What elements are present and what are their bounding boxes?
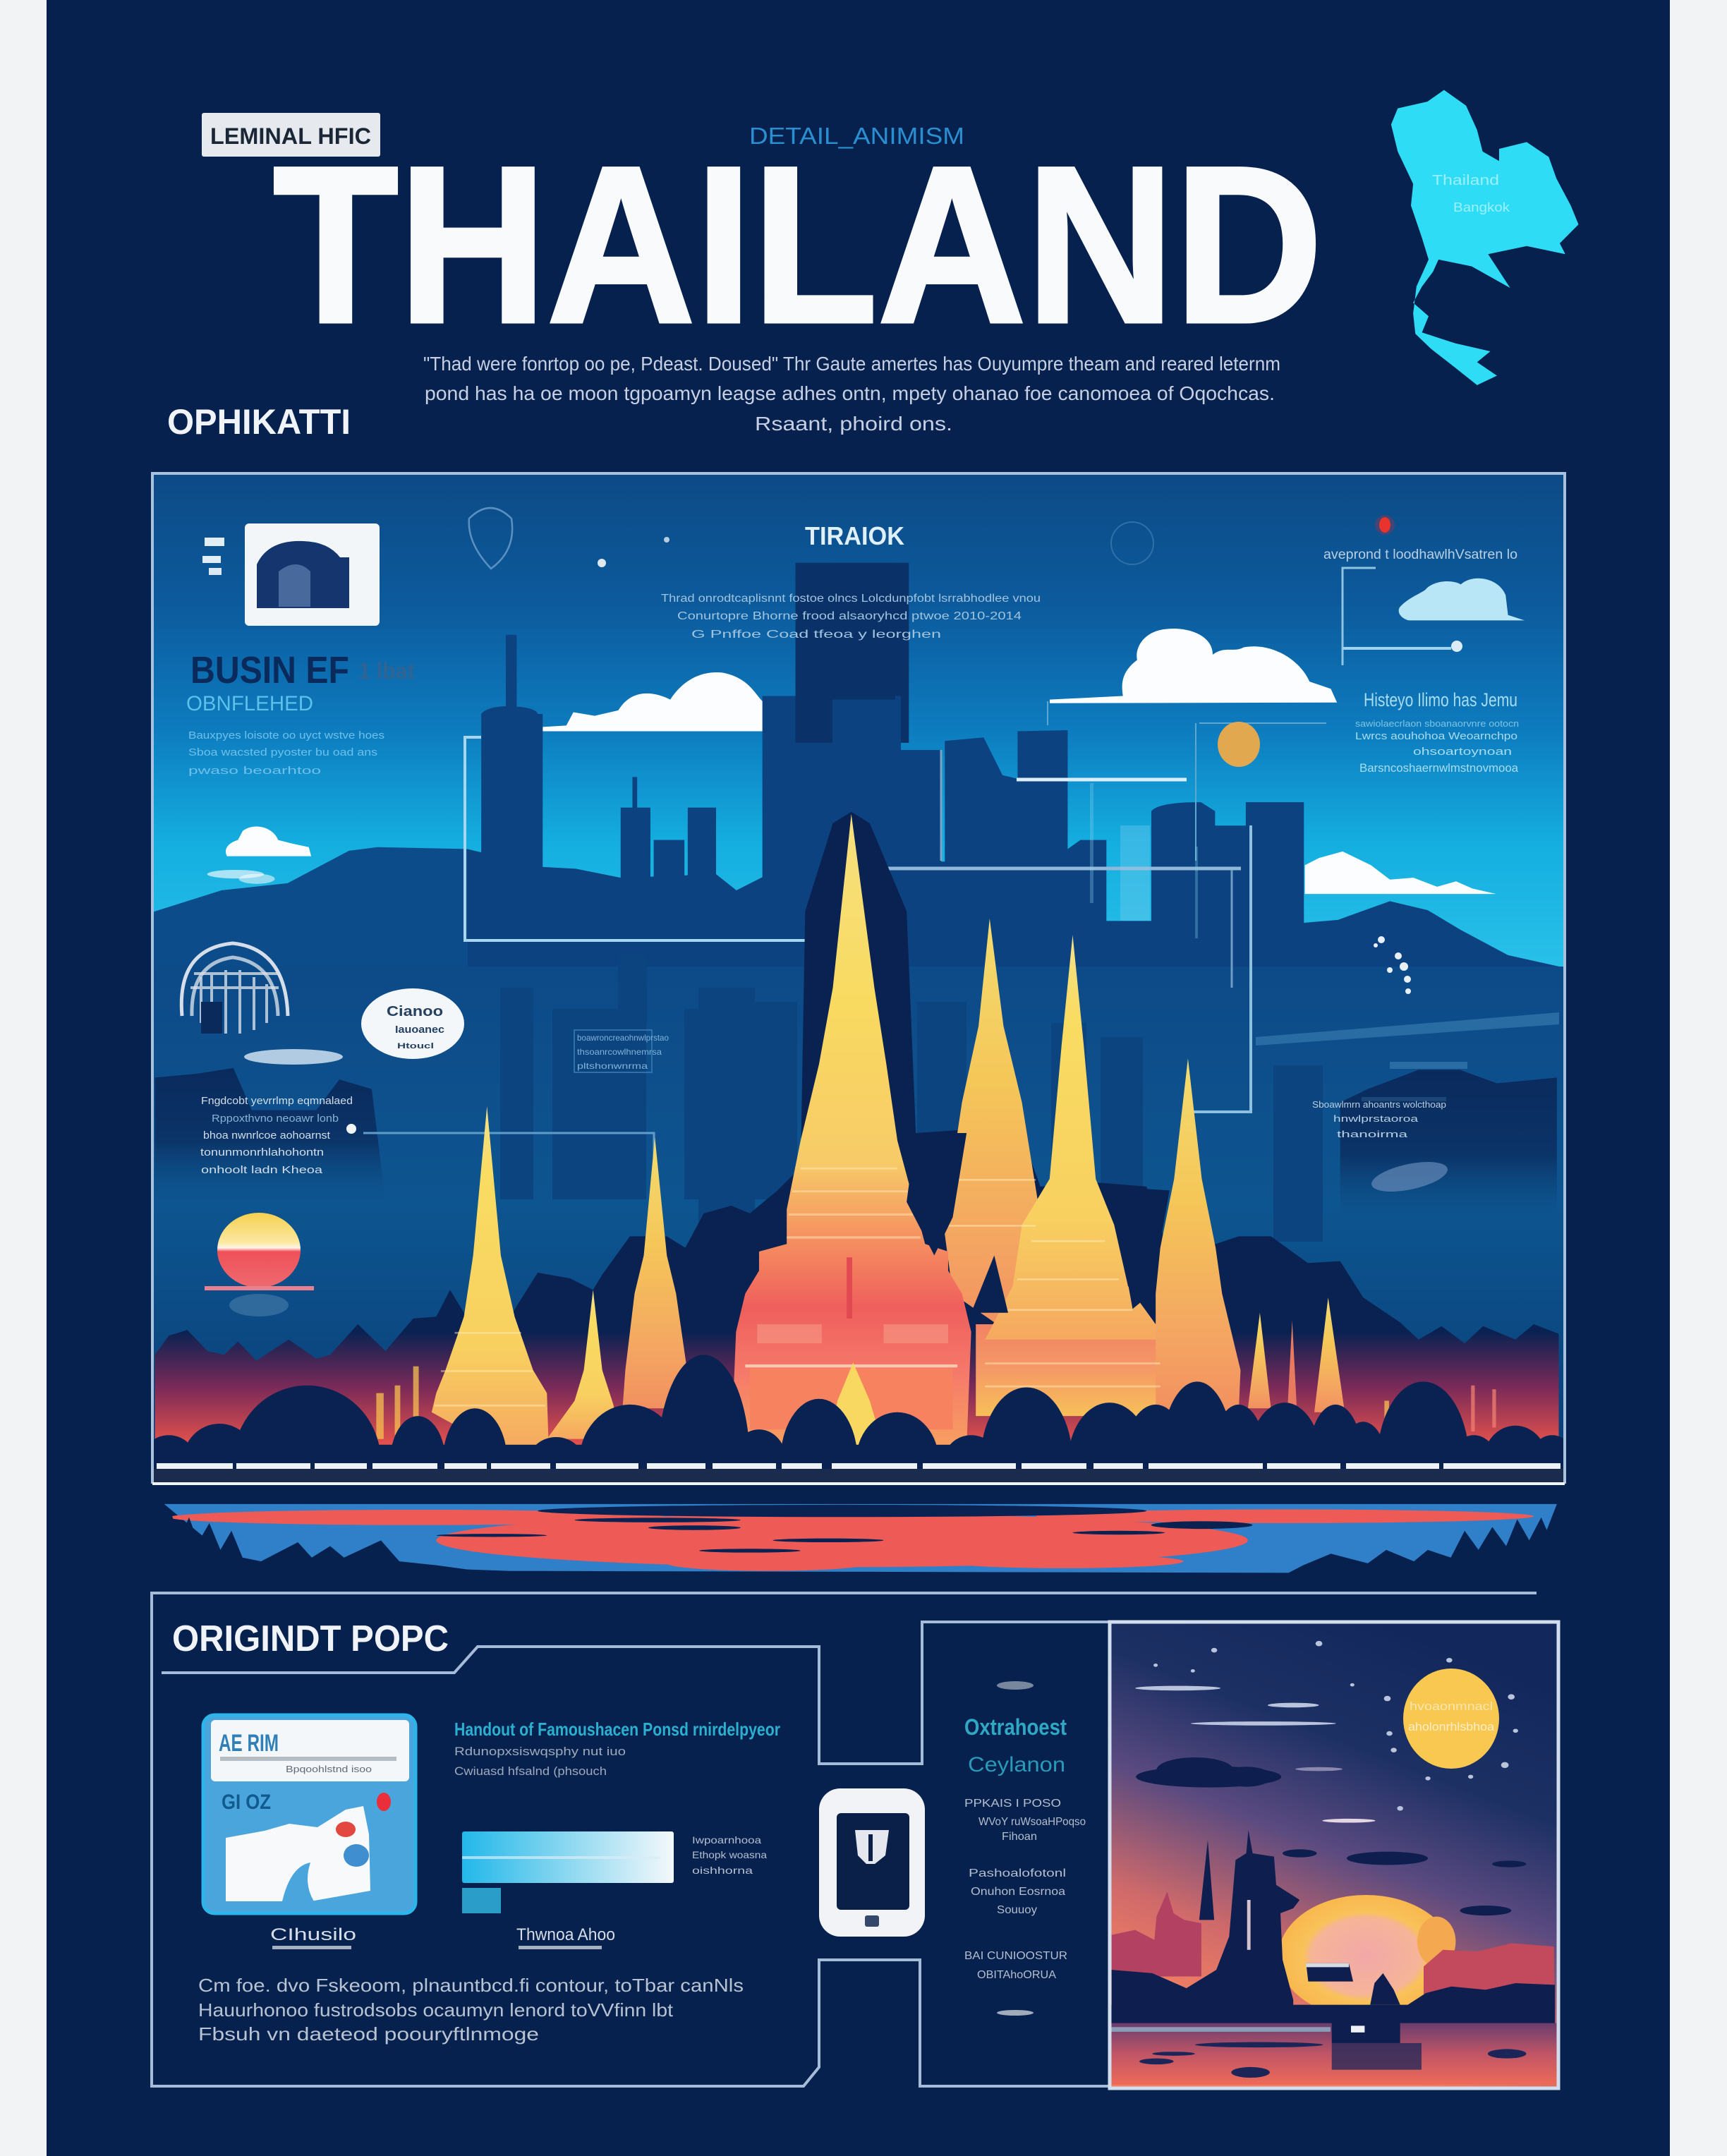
right text block: Histeyo Ilimo has Jemu [1364,689,1517,710]
section label: OPHIKATTI [167,402,351,442]
badge oval [361,988,464,1059]
right lower text block: Sboawlmrn ahoantrs wolcthoap [1312,1099,1446,1110]
right text block: sawiolaecrlaon sboanaorvnre ootocn [1355,718,1519,729]
left heading text block: OBNFLEHED [186,692,313,715]
temple [376,814,1496,1451]
bar chart: Iwpoarnhooa [692,1834,761,1846]
connector lines [363,568,1451,1171]
badge oval: Htoucl [397,1042,434,1050]
central mini text block: boawroncreaohnwlprstao [577,1033,669,1043]
map of Thailand [1391,90,1579,385]
spire: right gold [985,935,1174,1340]
bar caption: Thwnoa Ahoo [516,1925,615,1944]
subtitle: DETAIL_ANIMISM [749,123,964,149]
right brush marks [1256,1012,1559,1101]
intro text: Rsaant, phoird ons. [755,413,952,435]
bar chart [462,1831,767,1913]
icon: white flowers [1374,936,1411,994]
sunset panel frame [1110,1622,1558,2088]
icon: phone [819,1788,925,1937]
center heading text block [661,521,1041,641]
river reflection [155,1502,1558,1585]
setting sun [205,1213,314,1316]
translucent light beams [1090,783,1198,938]
left lower text block: bhoa nwnrlcoe aohoarnst [203,1130,331,1141]
right text block: Lwrcs aouhohoa Weoarnchpo [1355,730,1517,742]
left mountain [153,847,467,969]
wing: right hall [976,1324,1179,1416]
badge oval: Cianoo [387,1004,443,1019]
lower panel background [152,967,1565,1484]
spire: slim right [1156,1058,1240,1412]
left lower text block: Fngdcobt yevrrlmp eqmnalaed [201,1095,353,1107]
central hall detail [745,1257,957,1451]
bottom paragraph [198,1975,744,2045]
card caption: CIhusilo [270,1925,356,1944]
side column text: Souuoy [997,1904,1037,1916]
sunset illustration panel [1110,1622,1558,2088]
central mini text block: pltshonwnrma [577,1061,648,1071]
main panel frame [152,473,1565,1484]
left heading text block: BUSIN EF [190,649,349,691]
skyline [467,563,1559,967]
left heading text block [186,649,415,777]
card: map [203,1715,416,1913]
center heading text block: Thrad onrodtcaplisnnt fostoe olncs Lolcdunpfobt lsrrabhodlee vnou [661,593,1041,605]
icon: red marker with caption [1323,515,1517,562]
spire: central main [732,814,971,1447]
feature heading text: Cwiuasd hfsalnd (phsouch [454,1764,607,1778]
left heading text block: Sboa wacsted pyoster bu oad ans [188,746,377,758]
right text block: ohsoartoynoan [1413,746,1512,758]
spire: far right [943,919,1041,1332]
map of Thailand: Bangkok [1453,200,1510,214]
streak clouds and stars [1135,1641,1518,1823]
feature heading text [454,1719,780,1778]
main illustration panel [141,473,1575,1569]
clouds [207,579,1525,894]
left lower text block [200,1095,353,1176]
feature heading text: Handout of Famoushacen Ponsd rnirdelpyeor [454,1719,780,1740]
left lower text block: Rppoxthvno neoawr lonb [212,1113,339,1125]
side column text: PPKAIS I POSO [964,1798,1061,1810]
callout dot [346,1124,356,1134]
center heading text block: Conurtopre Bhorne frood alsaoryhcd ptwoe 2010-2014 [677,610,1022,622]
right lower text block [1312,1099,1446,1139]
left heading text block: 1 lbat [358,658,415,684]
spire: small right pair [1248,1297,1345,1412]
side column text: OBITAhoORUA [977,1969,1056,1981]
spire: left inner [622,1137,687,1408]
water [1110,2016,1557,2085]
card: map: AE RIM [219,1730,279,1757]
right text block: Barsncoshaernwlmstnovmooa [1359,761,1519,775]
feature heading text: Rdunopxsiswqsphy nut iuo [454,1745,626,1758]
bar chart: oishhorna [692,1865,753,1876]
tag label [202,113,380,157]
moon badge: hvoaonmnacl [1410,1700,1493,1713]
spire: left gold [432,1106,549,1451]
center heading text block: TIRAIOK [805,521,904,550]
card: map: Bpqoohlstnd isoo [286,1764,372,1774]
icon: white photo card [202,523,380,626]
intro text: "Thad were fonrtop oo pe, Pdeast. Doused" Thr Gaute amertes has Ouyumpre theam and reared leternm [423,353,1280,375]
left heading text block: pwaso beoarhtoo [188,765,321,777]
moon badge: aholonrhlsbhoa [1408,1720,1495,1733]
red far skyline [1112,1891,1554,1997]
icon: red marker with caption: aveprond t loodhawlhVsatren lo [1323,547,1517,562]
center heading text block: G Pnffoe Coad tfeoa y leorghen [691,629,941,641]
card caption [270,1925,356,1949]
central mini text block: thsoanrcowlhnemrsa [577,1047,662,1057]
tag label: LEMINAL HFIC [210,123,371,149]
side column text: Oxtrahoest [964,1714,1067,1740]
side column text: BAI CUNIOOSTUR [964,1950,1067,1962]
badge oval: Iauoanec [395,1024,444,1036]
grasses left and right [155,1502,492,1585]
central mini text block [574,1030,669,1072]
sky [152,473,1565,995]
side column text: Pashoalofotonl [969,1867,1066,1879]
large setting sun [1278,1895,1455,2018]
intro text [423,353,1280,435]
right lower text block: thanoirma [1337,1129,1408,1139]
side column text: WVoY ruWsoaHPoqso [978,1816,1086,1828]
side column text [964,1681,1086,2016]
back tree silhouette [155,812,1558,1462]
side column text: Onuhon Eosrnoa [971,1886,1065,1898]
section heading: ORIGINDT POPC [172,1618,449,1659]
foreground trees [141,1355,1575,1569]
bottom section frame [152,1593,1537,2086]
intro text: pond has ha oe moon tgpoamyn leagse adhes ontn, mpety ohanao foe canomoea of Oqochcas. [425,382,1275,404]
icon: elephant arch [181,943,288,1034]
white brush mark [244,1049,343,1065]
left heading text block: Bauxpyes loisote oo uyct wstve hoes [188,729,384,741]
right lower text block: hnwlprstaoroa [1333,1113,1419,1124]
bottom paragraph: Cm foe. dvo Fskeoom, plnauntbcd.fi contour, toTbar canNls [198,1975,744,1996]
side column text: Ceylanon [968,1753,1065,1776]
side column text: Fihoan [1002,1831,1037,1843]
left lower text block: tonunmonrhlahohontn [200,1146,324,1158]
tier stripes [435,1168,1161,1407]
bar chart: Ethopk woasna [692,1849,767,1860]
card: map: GI OZ [222,1791,271,1814]
brush blob [1369,1156,1450,1197]
lower side silhouettes [155,1068,1557,1197]
bottom paragraph: Hauurhonoo fustrodsobs ocaumyn lenord toVVfinn lbt [198,1999,674,2021]
dark gaps [907,1133,1170,1313]
right text block [1355,689,1519,775]
glow streaks [376,1367,1496,1439]
map of Thailand: Thailand [1432,173,1499,188]
callout dot [1451,641,1462,652]
ground strip [152,1458,1565,1484]
balloon and dots [469,508,1153,569]
bottom paragraph: Fbsuh vn daeteod poouryftlnmoge [198,2023,539,2045]
title: THAILAND [273,120,1323,369]
icon: gold coin [1218,722,1260,767]
lower skyline [500,955,1323,1249]
left lower text block: onhoolt ladn Kheoa [201,1164,323,1176]
moon badge [1403,1669,1499,1769]
dark tower silhouette [1110,1757,1555,2028]
